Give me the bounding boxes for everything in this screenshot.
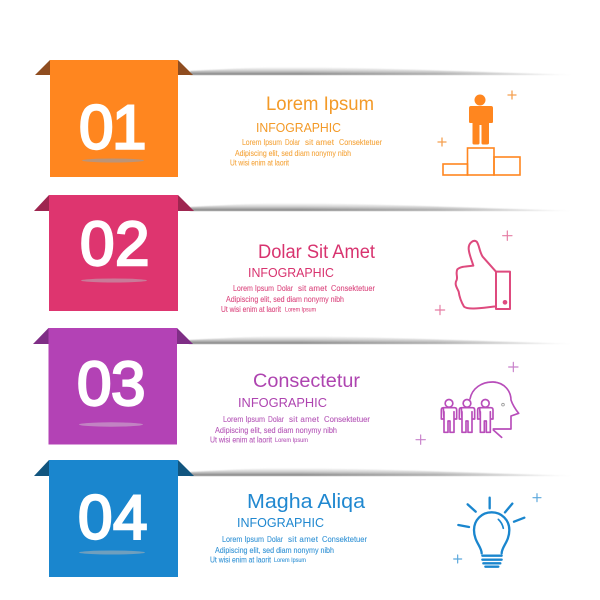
body text: Lorem Ipsum: [274, 558, 306, 564]
number: 03: [77, 350, 145, 419]
ribbon: [48, 328, 177, 444]
body text: sit amet: [298, 284, 328, 293]
body text: [210, 415, 370, 444]
body text: Consektetuer: [324, 415, 370, 424]
body text: Consektetuer: [322, 535, 367, 544]
title: Consectetur: [253, 371, 361, 392]
ribbon: [49, 460, 178, 577]
body text: Dolar: [268, 415, 284, 424]
body text: Dolar: [285, 138, 300, 147]
body text: Lorem Ipsum: [233, 284, 274, 293]
ribbon: [49, 195, 178, 311]
body text: Lorem Ipsum: [223, 415, 265, 424]
subtitle: INFOGRAPHIC: [256, 120, 341, 135]
number shadow: [81, 278, 147, 282]
ribbon folds: [35, 60, 193, 75]
subtitle: INFOGRAPHIC: [248, 265, 334, 280]
body text: Adipiscing elit, sed diam nonymy nibh: [215, 546, 334, 555]
number: 04: [78, 484, 147, 552]
body text: Lorem Ipsum: [222, 535, 264, 544]
number shadow: [82, 158, 144, 162]
panel: step 03: [33, 328, 586, 444]
body text: [230, 138, 382, 168]
ribbon folds: [33, 328, 193, 344]
body text: Consektetuer: [339, 138, 382, 147]
shadow strip: [186, 65, 586, 78]
number: 02: [80, 210, 149, 279]
body text: sit amet: [288, 535, 319, 544]
icon: thumbs up: [435, 231, 512, 315]
body text: Dolar: [277, 284, 293, 293]
ribbon folds: [34, 195, 194, 211]
ribbon folds: [34, 460, 194, 476]
body text: Consektetuer: [331, 284, 375, 293]
ribbon: [50, 60, 178, 177]
panel: step 02: [34, 195, 586, 315]
panel: step 01: [35, 60, 586, 177]
body text: Lorem Ipsum: [275, 438, 308, 444]
icon: person on podium: [438, 90, 520, 175]
panel: step 04: [34, 460, 586, 577]
number shadow: [79, 422, 143, 427]
number shadow: [79, 550, 145, 554]
title: Lorem Ipsum: [266, 94, 374, 115]
subtitle: INFOGRAPHIC: [237, 515, 324, 530]
body text: Ut wisi enim at laorit: [210, 556, 272, 564]
body text: sit amet: [305, 138, 335, 147]
body text: Ut wisi enim at laorit: [210, 436, 273, 444]
number: 01: [79, 94, 146, 162]
icon: light bulb: [454, 494, 541, 567]
body text: Lorem Ipsum: [285, 308, 316, 314]
body text: Ut wisi enim at laorit: [221, 305, 282, 314]
shadow strip: [186, 334, 586, 348]
body text: [221, 284, 375, 314]
body text: sit amet: [289, 415, 320, 424]
body text: [210, 535, 367, 564]
body text: Dolar: [267, 535, 283, 544]
subtitle: INFOGRAPHIC: [238, 395, 327, 410]
body text: Ut wisi enim at laorit: [230, 158, 290, 168]
body text: Lorem Ipsum: [242, 138, 282, 147]
body text: Adipiscing elit, sed diam nonymy nibh: [215, 426, 337, 435]
title: Magha Aliqa: [247, 491, 366, 513]
icon: team and head: [416, 362, 519, 444]
title: Dolar Sit Amet: [258, 242, 376, 263]
body text: Adipiscing elit, sed diam nonymy nibh: [235, 149, 351, 158]
shadow strip: [186, 466, 586, 480]
shadow strip: [186, 201, 586, 214]
body text: Adipiscing elit, sed diam nonymy nibh: [226, 295, 344, 304]
